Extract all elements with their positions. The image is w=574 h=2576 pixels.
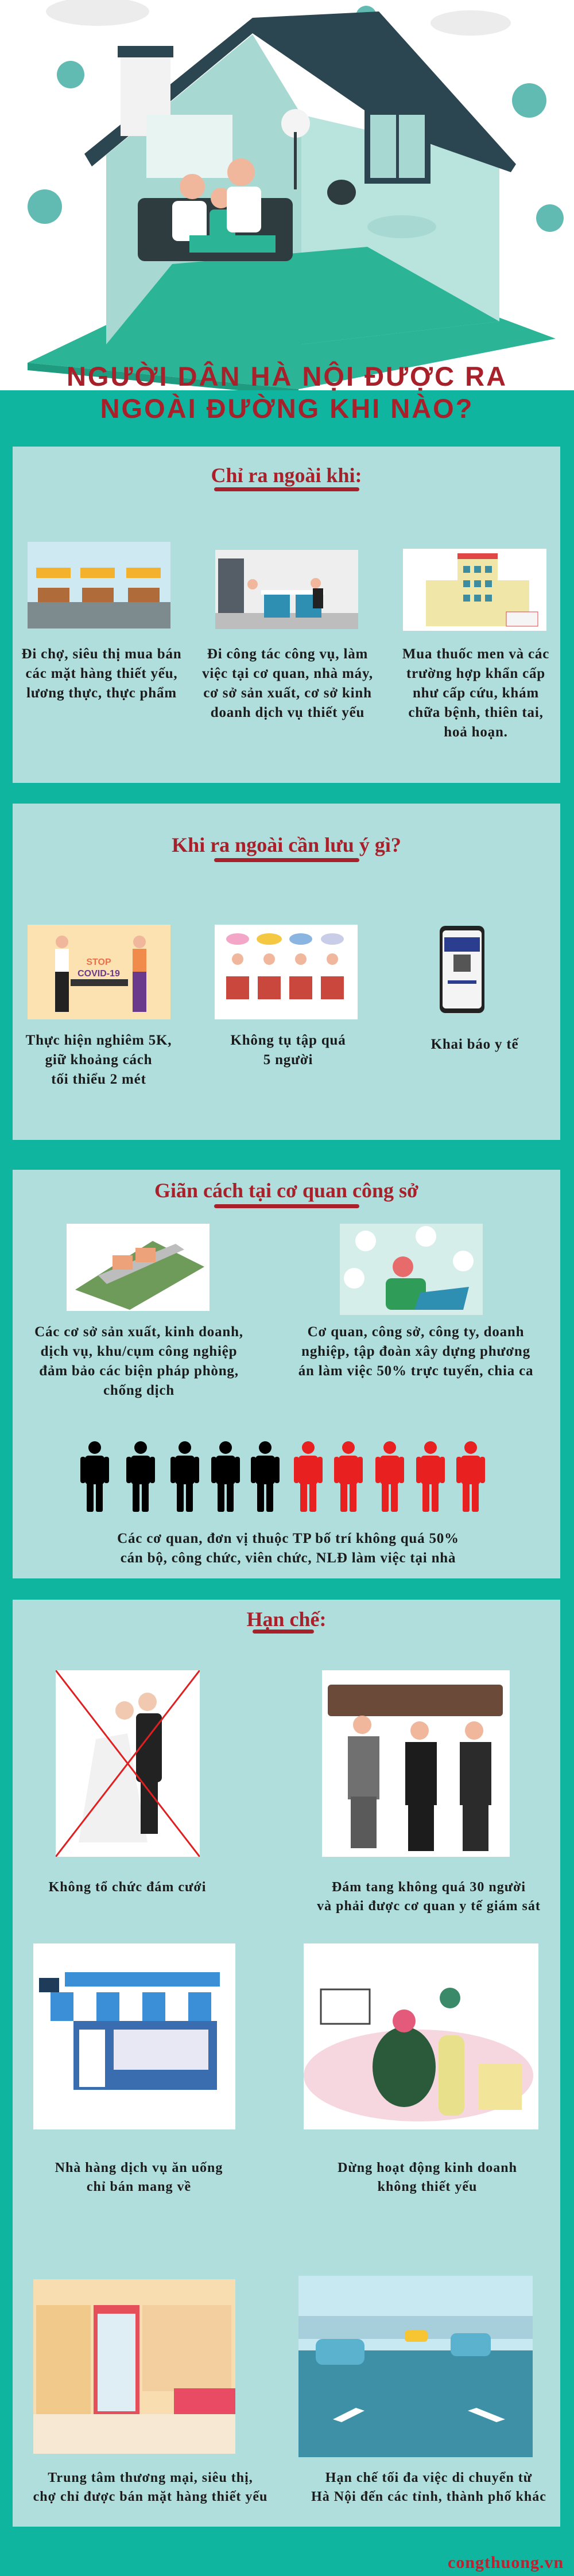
text: emergencies: chữa bệnh, thiên tai, [408,705,544,720]
text: work: cơ sở sản xuất, cơ sở kinh [203,685,372,701]
text: 50% caption [117,1531,459,1566]
text: offices: nghiệp, tập đoàn xây dựng phương [301,1344,530,1359]
image: restaurant storefront [33,1943,235,2129]
heading: Hạn chế: [247,1608,326,1631]
text: funerals [317,1880,541,1914]
text: travel limits [311,2470,546,2504]
text: emergencies: hoả hoạn. [444,724,508,740]
text: non-essential business: không thiết yếu [378,2179,477,2194]
image: market [28,542,170,629]
text: no gathering [230,1033,346,1068]
text: emergencies: trường hợp khẩn cấp [406,666,545,681]
text: 5K: tối thiểu 2 mét [51,1072,146,1087]
panel: giãn cách tại cơ quan công sở [13,1170,560,1578]
text: offices: án làm việc 50% trực tuyến, chia ca [298,1363,533,1379]
image: hair salon [304,1943,538,2129]
image: online working [340,1224,483,1315]
text: offices: Cơ quan, công sở, công ty, doanh [308,1324,524,1340]
text: work: Đi công tác công vụ, làm [207,646,368,662]
text: 50% caption: cán bộ, công chức, viên chức, NLĐ làm việc tại nhà [121,1550,456,1566]
text: non-essential business: Dừng hoạt động kinh doanh [338,2160,517,2175]
panel: chỉ ra ngoài khi [13,447,560,783]
heading: Chỉ ra ngoài khi: [211,464,362,487]
text: no gathering: Không tụ tập quá [230,1033,346,1048]
text: work: việc tại cơ quan, nhà máy, [202,666,373,681]
icon: phone health declaration [440,926,484,1013]
footer: source: congthuong.vn [448,2553,564,2572]
heading: Giãn cách tại cơ quan công sở [154,1179,418,1202]
title: NGƯỜI DÂN HÀ NỘI ĐƯỢC RA [67,361,507,391]
text: market: Đi chợ, siêu thị mua bán [22,646,181,662]
image: highway [298,2276,533,2457]
text: restaurants: chỉ bán mang về [87,2179,191,2194]
image: wedding crossed out [56,1670,200,1857]
text: travel limits: Hạn chế tối đa việc di chuyển từ [325,2470,532,2485]
text: offices [298,1324,533,1379]
text: shopping centers: chợ chỉ được bán mặt hàng thiết yếu [33,2489,267,2504]
heading: Khi ra ngoài cần lưu ý gì? [172,833,401,856]
text: production: dịch vụ, khu/cụm công nghiệp [41,1344,237,1359]
text: restaurants [55,2160,223,2194]
text: emergencies: như cấp cứu, khám [413,685,539,701]
text: health declaration: Khai báo y tế [431,1037,518,1052]
text: restaurants: Nhà hàng dịch vụ ăn uống [55,2160,223,2175]
text: funerals: Đám tang không quá 30 người [332,1880,526,1895]
image: office [215,550,358,629]
text: production: chống dịch [103,1383,174,1398]
image: 5K distancing [28,925,170,1019]
text: no gathering: 5 người [263,1052,313,1068]
image: funeral pallbearers [322,1670,510,1857]
image: 5K distancing: STOP [86,957,111,967]
text: funerals: và phải được cơ quan y tế giám sát [317,1899,541,1914]
text: 5K [26,1033,172,1087]
panel: hạn chế [13,1600,560,2527]
chart: 10 people pictogram, 5 black 5 red [80,1441,485,1512]
text: market: lương thực, thực phẩm [26,685,177,701]
text: shopping centers [33,2470,267,2504]
text: market: các mặt hàng thiết yếu, [26,666,177,681]
text: travel limits: Hà Nội đến các tỉnh, thành phố khác [311,2489,546,2504]
text: non-essential business [338,2160,517,2194]
text: 5K: Thực hiện nghiêm 5K, [26,1033,172,1048]
image: hospital [403,549,546,631]
text: production: Các cơ sở sản xuất, kinh doanh, [34,1324,243,1340]
text: work [202,646,373,720]
title: NGOÀI ĐƯỜNG KHI NÀO? [100,393,474,424]
text: shopping centers: Trung tâm thương mại, siêu thị, [48,2470,253,2485]
image: 5K distancing: COVID-19 [77,969,120,979]
text: emergencies: Mua thuốc men và các [402,646,549,662]
text: production: đảm bảo các biện pháp phòng, [39,1363,239,1379]
panel: khi ra ngoài cần lưu ý gì [13,804,560,1140]
image: supermarket [33,2279,235,2454]
image: production line [67,1224,210,1311]
text: no weddings: Không tổ chức đám cưới [49,1880,206,1895]
text: production [34,1324,243,1398]
text: emergencies [402,646,549,740]
text: 50% caption: Các cơ quan, đơn vị thuộc TP bố trí không quá 50% [117,1531,459,1546]
image: group meeting [215,925,358,1019]
text: work: doanh dịch vụ thiết yếu [211,705,364,720]
title [67,361,507,424]
hero illustration: family at home [0,0,574,390]
text: 5K: giữ khoảng cách [45,1052,152,1068]
text: market [22,646,181,701]
